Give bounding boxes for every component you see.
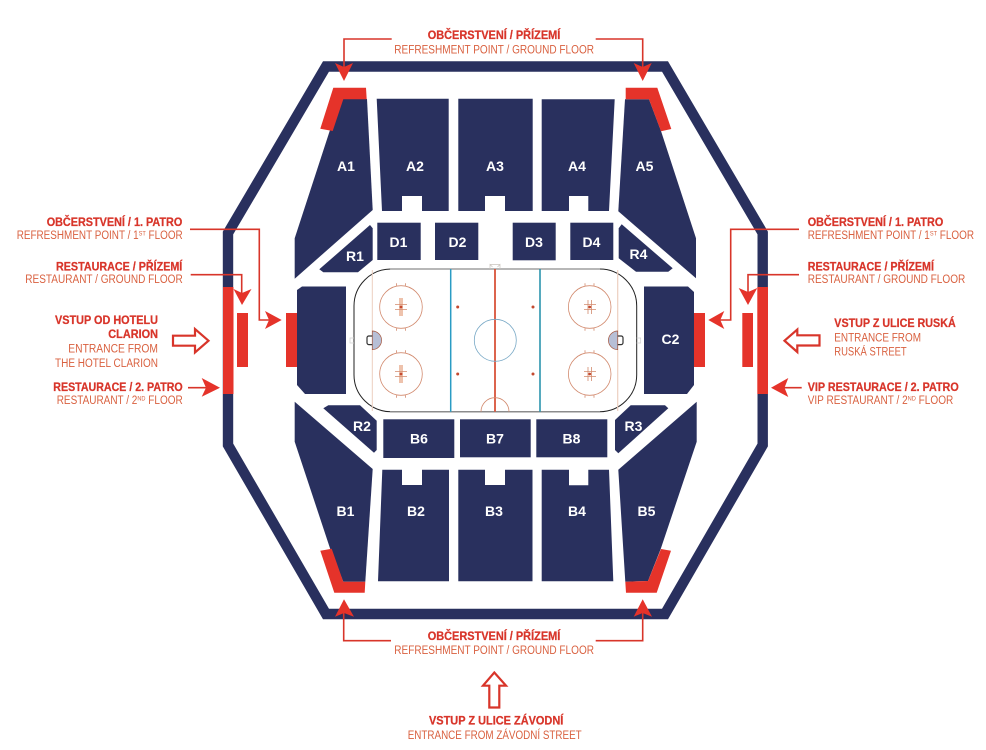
label: top refreshment point: REFRESHMENT POINT / GROUND FLOOR [394,44,594,56]
label: top refreshment point: OBČERSTVENÍ / PŘÍZEMÍ [428,29,561,42]
label: VIP restaurant 2nd floor: FLOOR [916,395,953,407]
label: VIP restaurant 2nd floor: ND [908,396,916,402]
section B4 [542,470,613,581]
section C2: C2 [662,331,680,347]
section A5 [618,88,696,278]
ice hockey rink [350,264,641,412]
section B6: B6 [410,430,428,446]
label: left refreshment 1st floor: FLOOR [146,230,183,242]
section A1 [295,88,373,279]
section R2 [323,405,377,453]
label: entrance from hotel Clarion: VSTUP OD HOTELU [55,315,158,327]
section R3: R3 [625,418,643,434]
arrow: entrance from Ruská street [784,330,820,352]
label: left restaurant ground floor: RESTAURACE / PŘÍZEMÍ [56,260,183,273]
label: right refreshment 1st floor [808,216,974,242]
section A4 [542,99,615,211]
section R3 [615,405,668,453]
arrow: right refreshment 1st floor [708,229,799,329]
arrow: top right refreshment [596,39,652,81]
label: left refreshment 1st floor: REFRESHMENT POINT / 1 [17,230,158,242]
section B5: B5 [638,503,656,519]
section R4: R4 [630,246,648,262]
label: bottom refreshment point [394,630,594,657]
section D3: D3 [525,234,543,250]
label: left restaurant 2nd floor [53,382,183,407]
arrow: bottom left refreshment [335,599,391,641]
label: right refreshment 1st floor: OBČERSTVENÍ / 1. PATRO [808,216,943,229]
arena outer wall [228,66,763,614]
label: entrance from hotel Clarion: ENTRANCE FROM [68,344,158,356]
section B7 [460,419,531,457]
section A2: A2 [406,158,424,174]
arrow: entrance from Závodní street [483,672,506,708]
section D1 [377,223,421,260]
section D2 [435,223,478,260]
label: left restaurant 2nd floor: RESTAURANT / 2 [57,395,150,407]
section D3 [513,223,556,260]
label: left restaurant 2nd floor: RESTAURACE / 2. PATRO [53,382,183,394]
arrow: left refreshment 1st floor [190,229,282,329]
section B1 [295,402,373,593]
arrow: left restaurant ground floor [191,275,252,305]
section B5 [618,402,697,593]
label: VIP restaurant 2nd floor: VIP RESTAURANT / 2 [808,395,922,407]
label: top refreshment point [394,29,594,56]
label: entrance from hotel Clarion: CLARION [108,329,158,341]
label: right restaurant ground floor: RESTAURACE / PŘÍZEMÍ [808,260,935,273]
label: right refreshment 1st floor: FLOOR [937,230,974,242]
label: entrance from hotel Clarion [55,315,158,370]
arrow: top left refreshment [335,39,392,81]
section D4 [570,223,613,260]
section C2 [644,286,694,394]
section C1 [297,286,346,394]
section A1: A1 [337,158,355,174]
section A3: A3 [486,158,504,174]
label: entrance from Ruská street: ENTRANCE FROM [834,332,921,344]
section A2 [377,99,449,211]
section R2: R2 [353,418,371,434]
section B8 [536,419,607,457]
label: left refreshment 1st floor: OBČERSTVENÍ / 1. PATRO [47,216,182,229]
arrow: VIP restaurant 2nd floor [771,378,802,397]
section A5: A5 [636,158,654,174]
label: right restaurant ground floor [808,260,965,286]
label: entrance from Ruská street: RUSKÁ STREET [834,346,907,359]
label: right restaurant ground floor: RESTAURANT / GROUND FLOOR [808,274,965,286]
section B2: B2 [407,503,425,519]
section B6 [383,419,454,458]
section R1 [319,225,373,272]
section B3: B3 [485,503,503,519]
label: right refreshment 1st floor: ST [930,230,937,238]
section B7: B7 [486,430,504,446]
section D1: D1 [390,234,408,250]
label: VIP restaurant 2nd floor [808,382,959,407]
label: VIP restaurant 2nd floor: VIP RESTAURACE / 2. PATRO [808,382,959,394]
arrow: left restaurant 2nd floor [188,378,220,397]
section R1: R1 [346,248,364,264]
label: entrance from Závodní street [408,714,582,742]
section B8: B8 [563,430,581,446]
label: entrance from hotel Clarion: THE HOTEL CLARION [55,358,158,370]
label: bottom refreshment point: REFRESHMENT POINT / GROUND FLOOR [394,645,594,657]
arrow: right restaurant ground floor [739,275,799,305]
label: left restaurant ground floor: RESTAURANT / GROUND FLOOR [25,274,183,286]
label: left refreshment 1st floor [17,216,183,242]
section D4: D4 [583,234,601,250]
section A3 [458,99,533,211]
label: left restaurant 2nd floor: FLOOR [146,395,183,407]
section D2: D2 [449,234,467,250]
label: entrance from Ruská street [834,317,956,359]
arrow: bottom right refreshment [596,599,652,641]
label: left restaurant 2nd floor: ND [137,396,146,402]
label: left refreshment 1st floor: ST [139,230,146,238]
label: bottom refreshment point: OBČERSTVENÍ / PŘÍZEMÍ [428,630,561,643]
label: entrance from Ruská street: VSTUP Z ULICE RUSKÁ [834,317,956,330]
section A4: A4 [568,158,586,174]
wall restaurant markers [223,287,768,394]
label: entrance from Závodní street: VSTUP Z ULICE ZÁVODNÍ [429,714,564,727]
section R4 [619,224,673,272]
section B2 [378,470,449,581]
label: entrance from Závodní street: ENTRANCE FROM ZÁVODNÍ STREET [408,729,582,742]
section B4: B4 [568,503,586,519]
label: right refreshment 1st floor: REFRESHMENT POINT / 1 [808,230,949,242]
label: left restaurant ground floor [25,260,183,286]
arrow: entrance from hotel Clarion [173,329,208,352]
section B1: B1 [337,503,355,519]
section B3 [458,470,532,581]
